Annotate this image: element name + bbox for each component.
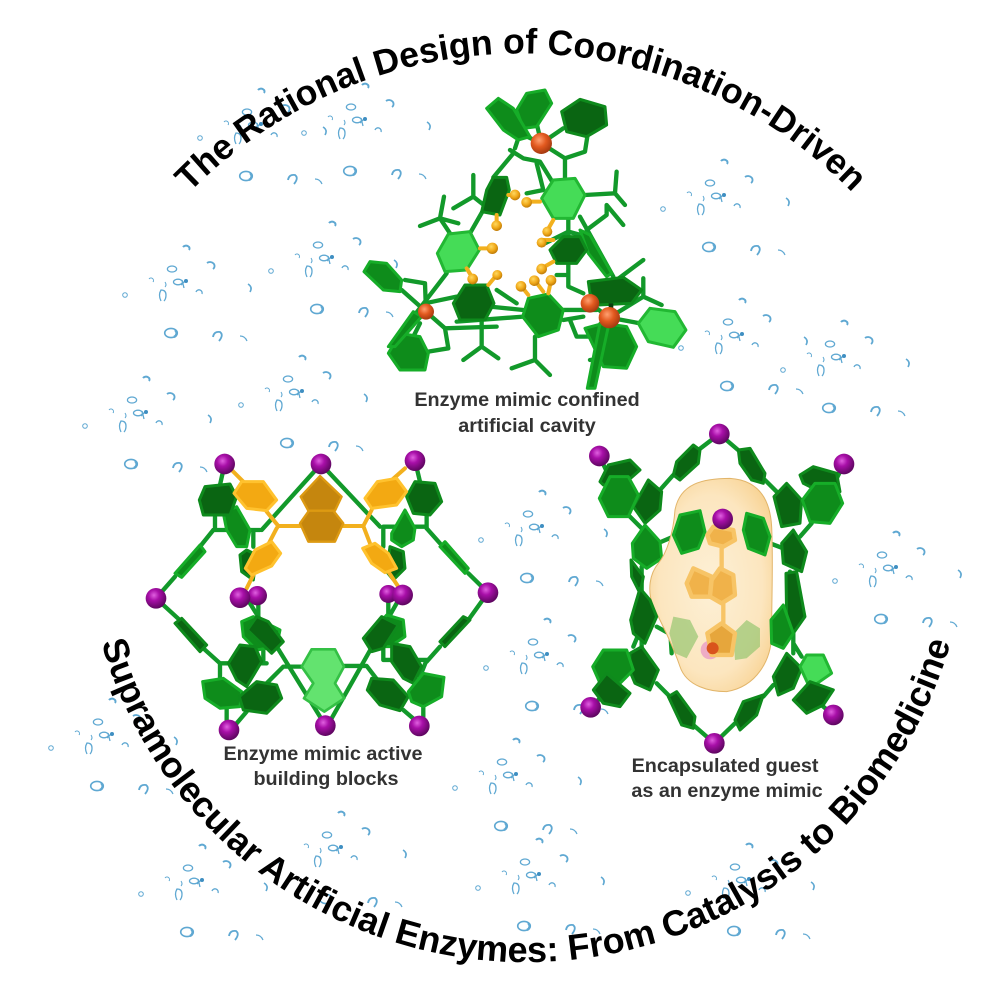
green rings <box>175 482 470 713</box>
green bonds <box>156 461 488 723</box>
caption: confined cavity: Enzyme mimic confined <box>414 389 640 411</box>
metal centres <box>418 133 620 328</box>
guest cavity surface <box>650 478 772 692</box>
faded rings through surface <box>669 617 760 660</box>
molecule: active building blocks <box>146 450 498 740</box>
molecule: encapsulated guest <box>580 424 854 754</box>
green rings <box>599 445 843 593</box>
front dark ring <box>588 277 642 305</box>
title: bottom arc: Supramolecular Artificial Enzymes: From Catalysis to Biomedicine <box>104 639 949 965</box>
green rings over surface <box>593 511 833 730</box>
background water droplets <box>49 84 961 940</box>
title: top arc: The Rational Design of Coordination-Driven <box>172 28 862 191</box>
caption: encapsulated guest: Encapsulated guest <box>632 755 819 777</box>
magenta metal nodes <box>580 424 854 754</box>
caption: confined cavity: artificial cavity <box>458 415 596 437</box>
caption: encapsulated guest: as an enzyme mimic <box>631 780 823 802</box>
molecule: confined artificial cavity <box>364 90 686 388</box>
rings <box>364 90 686 388</box>
green bonds <box>591 434 844 743</box>
magenta metal nodes <box>146 450 498 740</box>
caption: active building blocks: building blocks <box>253 768 399 790</box>
guest molecule <box>687 527 735 655</box>
caption: active building blocks: Enzyme mimic active <box>223 743 423 765</box>
gold catalytic groups <box>467 190 556 295</box>
bonds <box>402 123 662 375</box>
gold building block <box>232 468 407 588</box>
